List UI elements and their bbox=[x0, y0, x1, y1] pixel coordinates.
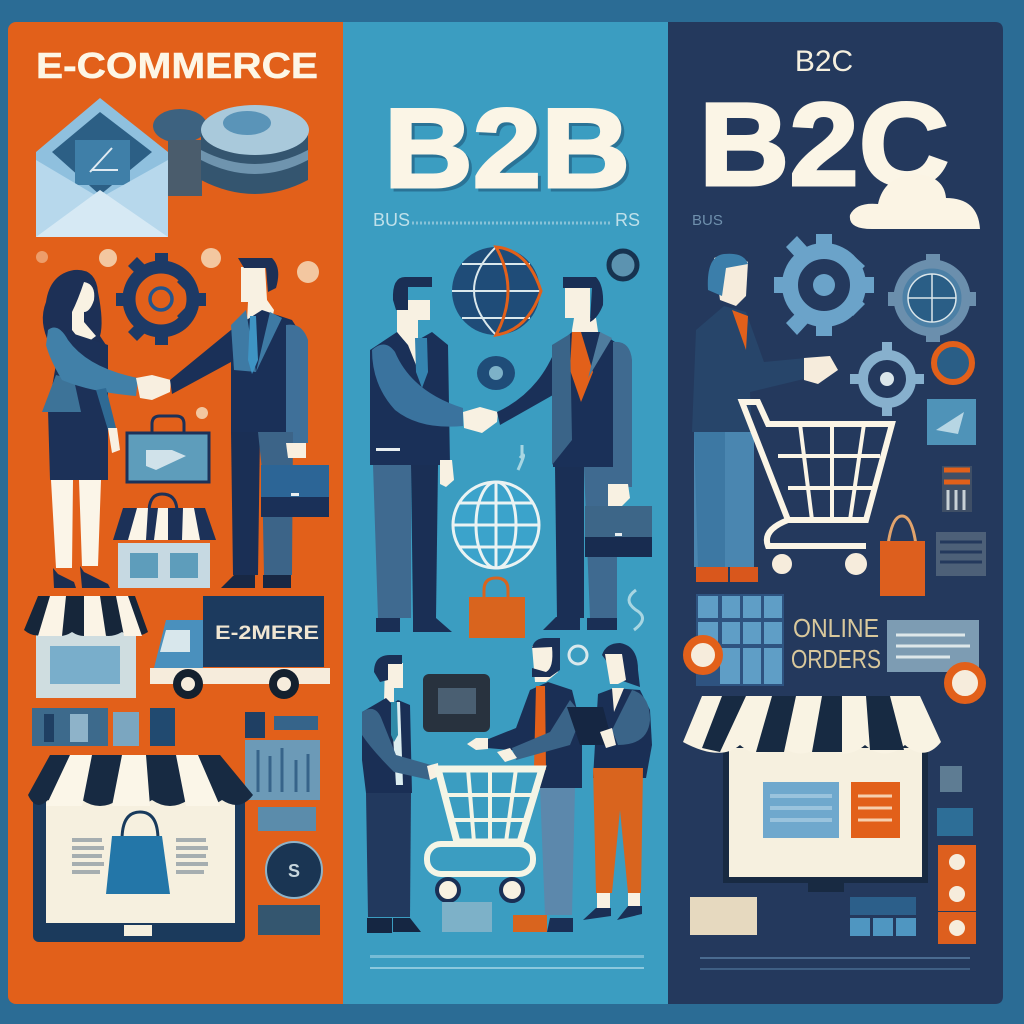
figure: left businessman bbox=[370, 277, 498, 632]
figure: right businessman bbox=[497, 277, 632, 630]
small boxes at bottom bbox=[370, 902, 644, 969]
icon: round badge bbox=[266, 842, 322, 898]
icon: orange ring left bbox=[687, 639, 719, 671]
icon: stacked discs bbox=[153, 105, 309, 196]
icon: main storefront monitor bbox=[683, 696, 941, 892]
heading: e-commerce: E-COMMERCE bbox=[36, 45, 318, 86]
icon: tablet bag bbox=[127, 416, 209, 482]
subheading: business label: RS bbox=[615, 210, 640, 230]
icon: briefcase bbox=[261, 465, 329, 517]
figure: team man left bbox=[362, 655, 439, 933]
icon: delivery truck: E-2MERE bbox=[215, 623, 319, 644]
icon: large cart bbox=[742, 402, 892, 576]
icon: large gear bbox=[774, 234, 874, 336]
icon: gear bbox=[116, 253, 206, 345]
label: online orders: ORDERS bbox=[791, 644, 881, 674]
figure: businesswoman bbox=[42, 270, 171, 588]
figure: team man centre bbox=[467, 638, 582, 932]
icon: parcel and blue tiles bbox=[690, 897, 970, 970]
decorative glyphs mid column bbox=[518, 445, 643, 664]
subheading: business label: BUS bbox=[373, 210, 410, 230]
icon: b2b briefcase bbox=[585, 506, 652, 557]
subheading: b2c: B2C bbox=[795, 45, 853, 78]
icon: order form bbox=[887, 620, 979, 672]
icon: picture tile bbox=[927, 399, 976, 445]
icons: right side tiles bbox=[937, 766, 976, 944]
icon: document chart bbox=[245, 740, 320, 831]
label: online orders bbox=[791, 613, 881, 674]
icon: small gear bbox=[850, 342, 924, 416]
heading: b2b: B2B bbox=[384, 86, 630, 211]
icon: small shop bbox=[113, 494, 216, 588]
icon: line globe bbox=[453, 482, 539, 568]
figure: businessman bbox=[170, 258, 308, 588]
panel: e-commerce bbox=[8, 22, 353, 1004]
icon: orange pattern tile bbox=[942, 466, 972, 512]
icon: shopping cart bbox=[427, 769, 542, 901]
icon: wireframe globe bbox=[452, 247, 541, 335]
icon: orange ring right bbox=[948, 666, 982, 700]
subheading: business label bbox=[373, 210, 640, 230]
figure: shopper bbox=[692, 254, 838, 582]
icon: online store monitor bbox=[28, 755, 253, 942]
icon: envelope bbox=[36, 98, 168, 237]
icon: list tile bbox=[936, 532, 986, 576]
panel: b2c bbox=[668, 22, 1003, 1004]
icon: small panel bbox=[258, 905, 320, 935]
panel: b2b bbox=[343, 22, 670, 1004]
icon: orange ring badge bbox=[934, 344, 972, 382]
icon: product grid bbox=[696, 594, 784, 686]
icon: cloud bbox=[850, 174, 980, 229]
label: business: BUS bbox=[692, 212, 723, 229]
icon: gear with globe bbox=[888, 254, 976, 342]
heading: b2c large: B2C bbox=[699, 79, 949, 211]
icon: orange shopping bag bbox=[469, 578, 525, 638]
icon: round badge: S bbox=[288, 861, 300, 881]
small document icons row bbox=[32, 708, 318, 746]
icon: small coin bbox=[609, 251, 637, 279]
icon: orange bag bbox=[880, 516, 925, 596]
label: online orders: ONLINE bbox=[793, 613, 879, 643]
icon: delivery truck bbox=[150, 596, 330, 699]
icon: small emblem bbox=[477, 356, 515, 390]
icon: awning storefront bbox=[24, 596, 148, 698]
small doodles on orange bbox=[36, 248, 319, 419]
figure: team woman right bbox=[567, 643, 652, 920]
icon: dark monitor bbox=[423, 674, 490, 732]
